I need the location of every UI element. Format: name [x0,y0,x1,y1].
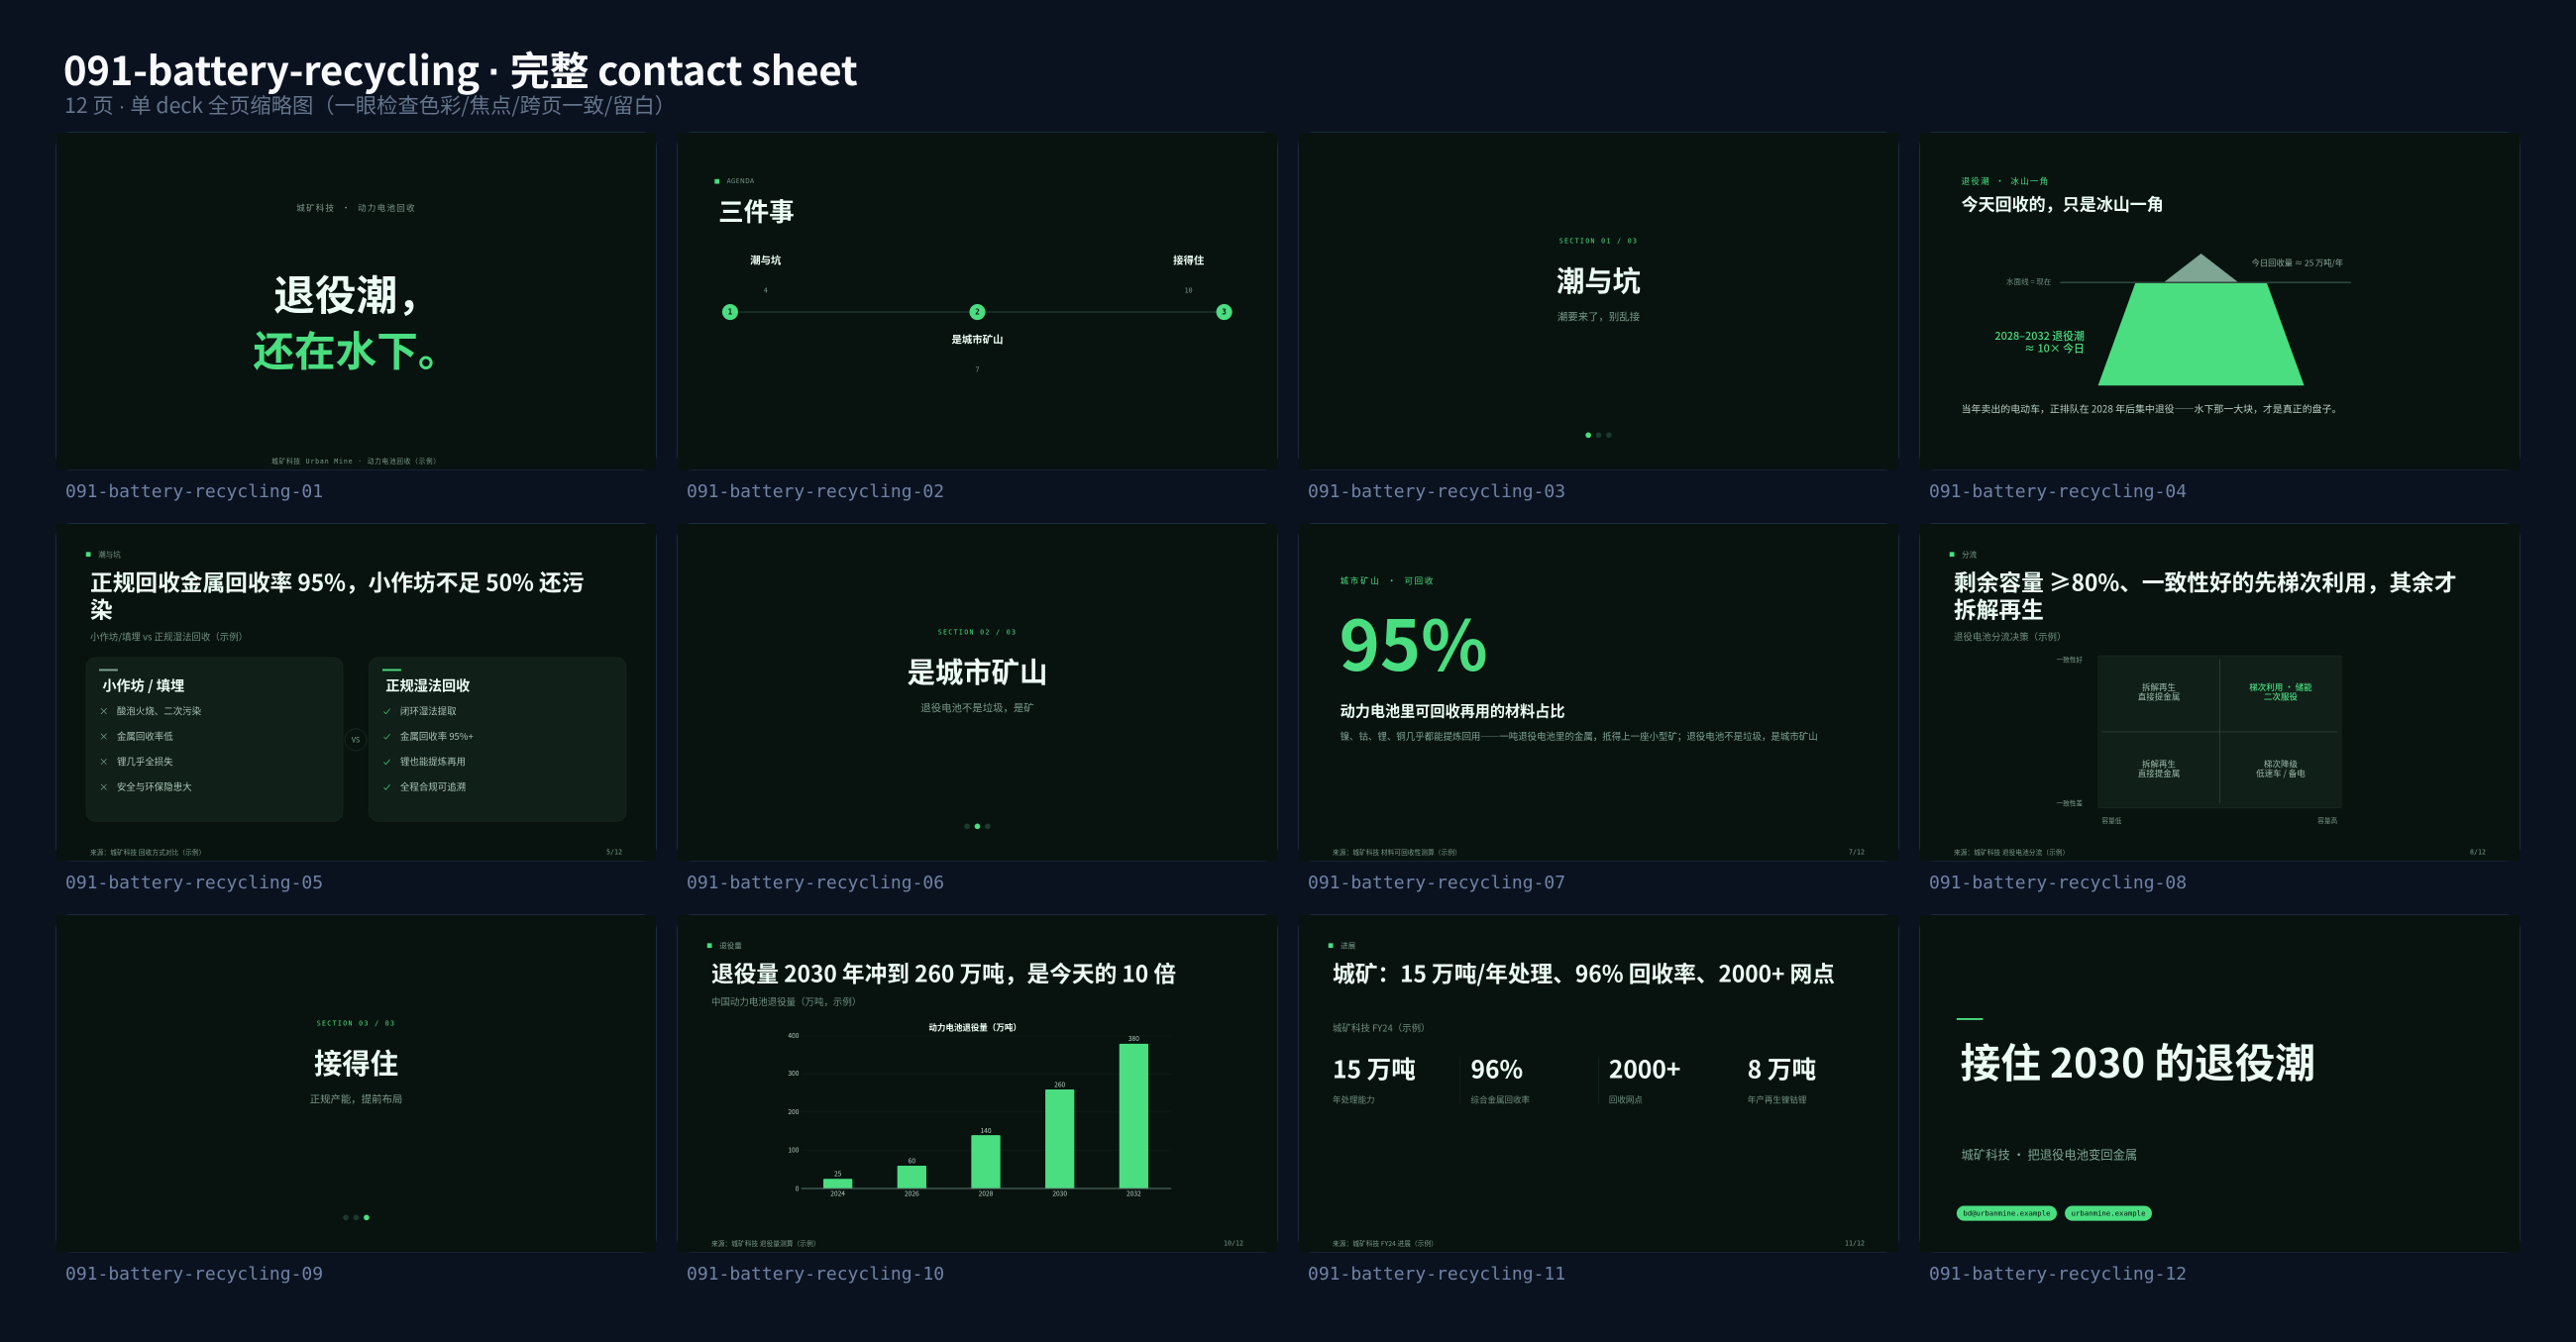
stat value 4: 8 万吨 [1748,1050,1816,1085]
title: 091-battery-recycling · 完整 contact sheet [63,40,858,97]
page number: 11/12 [1845,1240,1865,1248]
agenda item 1 page: 4 [764,287,768,295]
bar chart [788,1022,1171,1198]
contact pill email: bd@urbanmine.example [1963,1209,2051,1217]
slide label 09: 091-battery-recycling-09 [65,1264,323,1285]
description: 镍、钴、锂、铜几乎都能提炼回用——一吨退役电池里的金属，抵得上一座小型矿；退役电池不是垃圾，是城市矿山 [1341,729,1818,743]
panel: slide 03 section [1298,132,1899,470]
panel: slide 09 section [55,914,657,1253]
bar 2030: 2030 [1052,1188,1067,1198]
closing subtitle: 城矿科技 · 把退役电池变回金属 [1962,1145,2137,1163]
eyebrow text: AGENDA [727,176,754,185]
slide label 10: 091-battery-recycling-10 [687,1264,944,1285]
heading [1954,565,2457,625]
pro item 3: 锂也能提炼再用 [400,755,466,768]
divider 2 [1597,1057,1600,1103]
subheading: 小作坊/填埋 vs 正规湿法回收（示例） [90,630,248,643]
bar 2026: 2026 [905,1188,919,1198]
matrix horizontal axis [2101,730,2337,733]
timeline node 3 [1217,304,1233,320]
panel: slide 08 matrix [1919,523,2521,862]
heading: 今天回收的，只是冰山一角 [1962,191,2164,216]
heading: 正规回收金属回收率 95%，小作坊不足 50% 还污 [90,565,584,597]
slide label 03: 091-battery-recycling-03 [1308,481,1565,502]
accent bar right [382,670,401,671]
heading: 城矿：15 万吨/年处理、96% 回收率、2000+ 网点 [1333,956,1835,988]
panel: slide 04 iceberg [1919,132,2521,470]
stat label 3: 回收网点 [1609,1093,1643,1105]
heading: 退役量 2030 年冲到 260 万吨，是今天的 10 倍 [711,956,1176,988]
eyebrow marker [1950,552,1955,557]
y axis labels: 200 [788,1106,800,1116]
y axis label top: 一致性好 [2057,655,2083,665]
panel: slide 07 big number [1298,523,1899,862]
eyebrow: 城市矿山 · 可回收 [1341,574,1435,586]
timeline line [730,310,1225,313]
timeline node 1: 1 [728,307,732,316]
source footer: 来源：城矿科技 回收方式对比（示例） [90,848,205,858]
bar 2024 [823,1169,852,1198]
cover footer: 城矿科技 Urban Mine · 动力电池回收（示例） [271,458,441,465]
accent bar [1957,1018,1983,1020]
timeline node 1 [722,304,738,320]
y axis labels: 300 [788,1068,800,1078]
x axis label left: 容量低 [2101,816,2121,825]
subtitle: 12 页 · 单 deck 全页缩略图（一眼检查色彩/焦点/跨页一致/留白） [64,89,676,120]
quadrant bottom-right [2256,758,2306,779]
quadrant bottom-left: 拆解再生 [2142,758,2176,770]
closing heading: 接住 2030 的退役潮 [1961,1031,2315,1089]
section subtitle: 正规产能，提前布局 [310,1091,402,1106]
stat label 2: 综合金属回收率 [1470,1093,1530,1105]
bar 2028: 140 [980,1125,992,1135]
bar 2026: 60 [909,1156,915,1166]
section number: SECTION 03 / 03 [317,1020,395,1027]
progress dots [964,824,991,830]
stat value 1: 15 万吨 [1333,1050,1416,1085]
pro item 4: 全程合规可追溯 [400,779,466,793]
bar 2028: 2028 [979,1188,994,1198]
section number: SECTION 01 / 03 [1559,238,1638,245]
y axis labels: 0 [796,1183,800,1192]
page number: 5/12 [606,849,622,857]
con item 4: 安全与环保隐患大 [117,779,192,793]
slide label 06: 091-battery-recycling-06 [687,873,944,893]
y axis labels: 100 [788,1145,800,1155]
submerged label: 2028–2032 退役潮 [1994,327,2085,343]
heading: 剩余容量 ≥80%、一致性好的先梯次利用，其余才 [1954,565,2457,597]
pro item 1: 闭环湿法提取 [400,703,457,717]
eyebrow marker [1329,943,1334,948]
slide label 12: 091-battery-recycling-12 [1929,1264,2187,1285]
heading: 拆解再生 [1954,592,2044,625]
bar 2030: 260 [1054,1079,1066,1088]
quadrant top-left [2138,680,2180,703]
source footer: 来源：城矿科技 退役电池分流（示例） [1954,848,2069,858]
panel: slide 10 bar chart [677,914,1278,1253]
section number: SECTION 02 / 03 [938,629,1017,636]
subheading: 退役电池分流决策（示例） [1954,630,2066,643]
submerged label: ≈ 10× 今日 [2024,340,2085,356]
panel: slide 05 comparison [55,523,657,862]
bar 2024: 2024 [830,1188,845,1198]
heading: 染 [90,592,113,625]
source footer: 来源：城矿科技 材料可回收性测算（示例） [1333,848,1461,858]
panel: slide 01 cover [55,132,657,470]
eyebrow text: 潮与坑 [98,549,121,560]
slide label 05: 091-battery-recycling-05 [65,873,323,893]
con item 3: 锂几乎全损失 [117,755,173,768]
contact pill site [2065,1206,2152,1221]
con item 2: 金属回收率低 [117,729,173,743]
agenda item 3 label: 接得住 [1173,253,1204,267]
bar 2024: 25 [834,1169,842,1179]
subheading: 中国动力电池退役量（万吨，示例） [711,994,861,1008]
quadrant top-left: 直接提金属 [2138,690,2180,703]
page number: 10/12 [1224,1240,1243,1248]
slide label 01: 091-battery-recycling-01 [65,481,323,502]
slide label 07: 091-battery-recycling-07 [1308,873,1565,893]
panel: slide 02 agenda [677,132,1278,470]
slide label 02: 091-battery-recycling-02 [687,481,944,502]
quadrant bottom-right: 梯次降级 [2264,758,2298,770]
y axis labels: 400 [788,1030,800,1040]
quadrant top-right [2249,680,2312,703]
eyebrow: 退役潮 · 冰山一角 [1962,175,2049,187]
accent bar left [99,670,118,671]
stat value 2: 96% [1470,1050,1523,1085]
x axis [802,1187,1171,1189]
statement: 动力电池里可回收再用的材料占比 [1341,699,1564,721]
agenda item 1 label: 潮与坑 [750,253,781,267]
matrix vertical axis [2218,660,2221,803]
panel: slide 12 closing [1919,914,2521,1253]
quadrant bottom-right: 低速车 / 备电 [2256,768,2306,779]
decision matrix [2098,656,2341,808]
source footer: 来源：城矿科技 FY24 进展（示例） [1333,1239,1438,1249]
chart title: 动力电池退役量（万吨） [928,1022,1021,1034]
timeline node 3: 3 [1222,307,1227,316]
divider 1 [1459,1057,1461,1103]
eyebrow marker [707,943,712,948]
visible tip [2164,254,2238,282]
agenda item 3 page: 10 [1185,287,1193,295]
eyebrow text: 退役量 [719,940,742,951]
panel: formal recycling [369,658,626,822]
eyebrow text: 进展 [1341,940,1355,951]
submerged mass [2098,282,2305,385]
tip label: 今日回收量 ≈ 25 万吨/年 [2252,258,2343,269]
progress dots [343,1214,370,1220]
stat label 1: 年处理能力 [1333,1093,1375,1105]
body text: 当年卖出的电动车，正排队在 2028 年后集中退役——水下那一大块，才是真正的盘子。 [1962,402,2341,416]
section subtitle: 潮要来了，别乱接 [1557,309,1640,324]
section title: 是城市矿山 [908,650,1047,691]
stat value 3: 2000+ [1609,1050,1680,1085]
big number: 95% [1340,589,1488,690]
section subtitle: 退役电池不是垃圾，是矿 [920,700,1034,715]
agenda item 2 page: 7 [976,366,979,373]
eyebrow marker [86,552,91,557]
page number: 8/12 [2470,849,2486,857]
vs badge [345,729,367,751]
iceberg diagram [2060,254,2351,386]
panel: slide 06 section [677,523,1278,862]
submerged label [1994,327,2085,356]
subheading: 城矿科技 FY24（示例） [1333,1021,1431,1034]
quadrant top-left: 拆解再生 [2142,680,2176,693]
con item 1: 酸泡火烧、二次污染 [117,703,201,717]
panel: slide 11 stats [1298,914,1899,1253]
bar 2028 [971,1125,1001,1198]
card heading left: 小作坊 / 填埋 [102,674,184,695]
heading [90,565,584,625]
panel: workshop [86,658,343,822]
section title: 潮与坑 [1556,258,1641,300]
cover eyebrow: 城矿科技 · 动力电池回收 [296,201,416,214]
agenda heading: 三件事 [718,191,795,228]
quadrant bottom-left [2138,758,2180,779]
contact pill site: urbanmine.example [2072,1209,2145,1217]
timeline node 2: 2 [975,307,980,316]
slide label 04: 091-battery-recycling-04 [1929,481,2187,502]
page number: 7/12 [1849,849,1865,857]
source footer: 来源：城矿科技 退役量测算（示例） [711,1239,820,1249]
timeline node 2 [969,304,986,320]
slide label 11: 091-battery-recycling-11 [1308,1264,1565,1285]
water line [2060,281,2351,284]
x axis label right: 容量高 [2317,816,2337,825]
progress dots [1585,432,1612,438]
bar 2030 [1045,1079,1074,1198]
bar 2032: 2032 [1127,1188,1141,1198]
bar 2026 [898,1156,926,1198]
pro item 2: 金属回收率 95%+ [400,729,474,743]
slide label 08: 091-battery-recycling-08 [1929,873,2187,893]
cover title line 1: 退役潮， [273,262,439,322]
stat label 4: 年产再生镍钴锂 [1748,1093,1806,1105]
quadrant bottom-left: 直接提金属 [2138,768,2180,779]
quadrant top-right: 二次服役 [2264,690,2298,703]
quadrant top-right: 梯次利用 · 储能 [2249,680,2312,693]
bar 2032: 380 [1128,1033,1139,1043]
eyebrow marker [714,179,719,184]
contact pill email [1957,1206,2057,1221]
water line label: 水面线 = 现在 [2006,275,2051,287]
cover title line 2: 还在水下。 [254,319,459,378]
card heading right: 正规湿法回收 [385,674,470,695]
y axis label bottom: 一致性差 [2057,798,2083,808]
agenda item 2 label: 是城市矿山 [952,332,1003,347]
y axis labels [788,1030,800,1192]
section title: 接得住 [314,1041,398,1083]
eyebrow text: 分流 [1962,549,1977,560]
vs badge: VS [352,735,360,745]
bar 2032 [1120,1033,1148,1198]
